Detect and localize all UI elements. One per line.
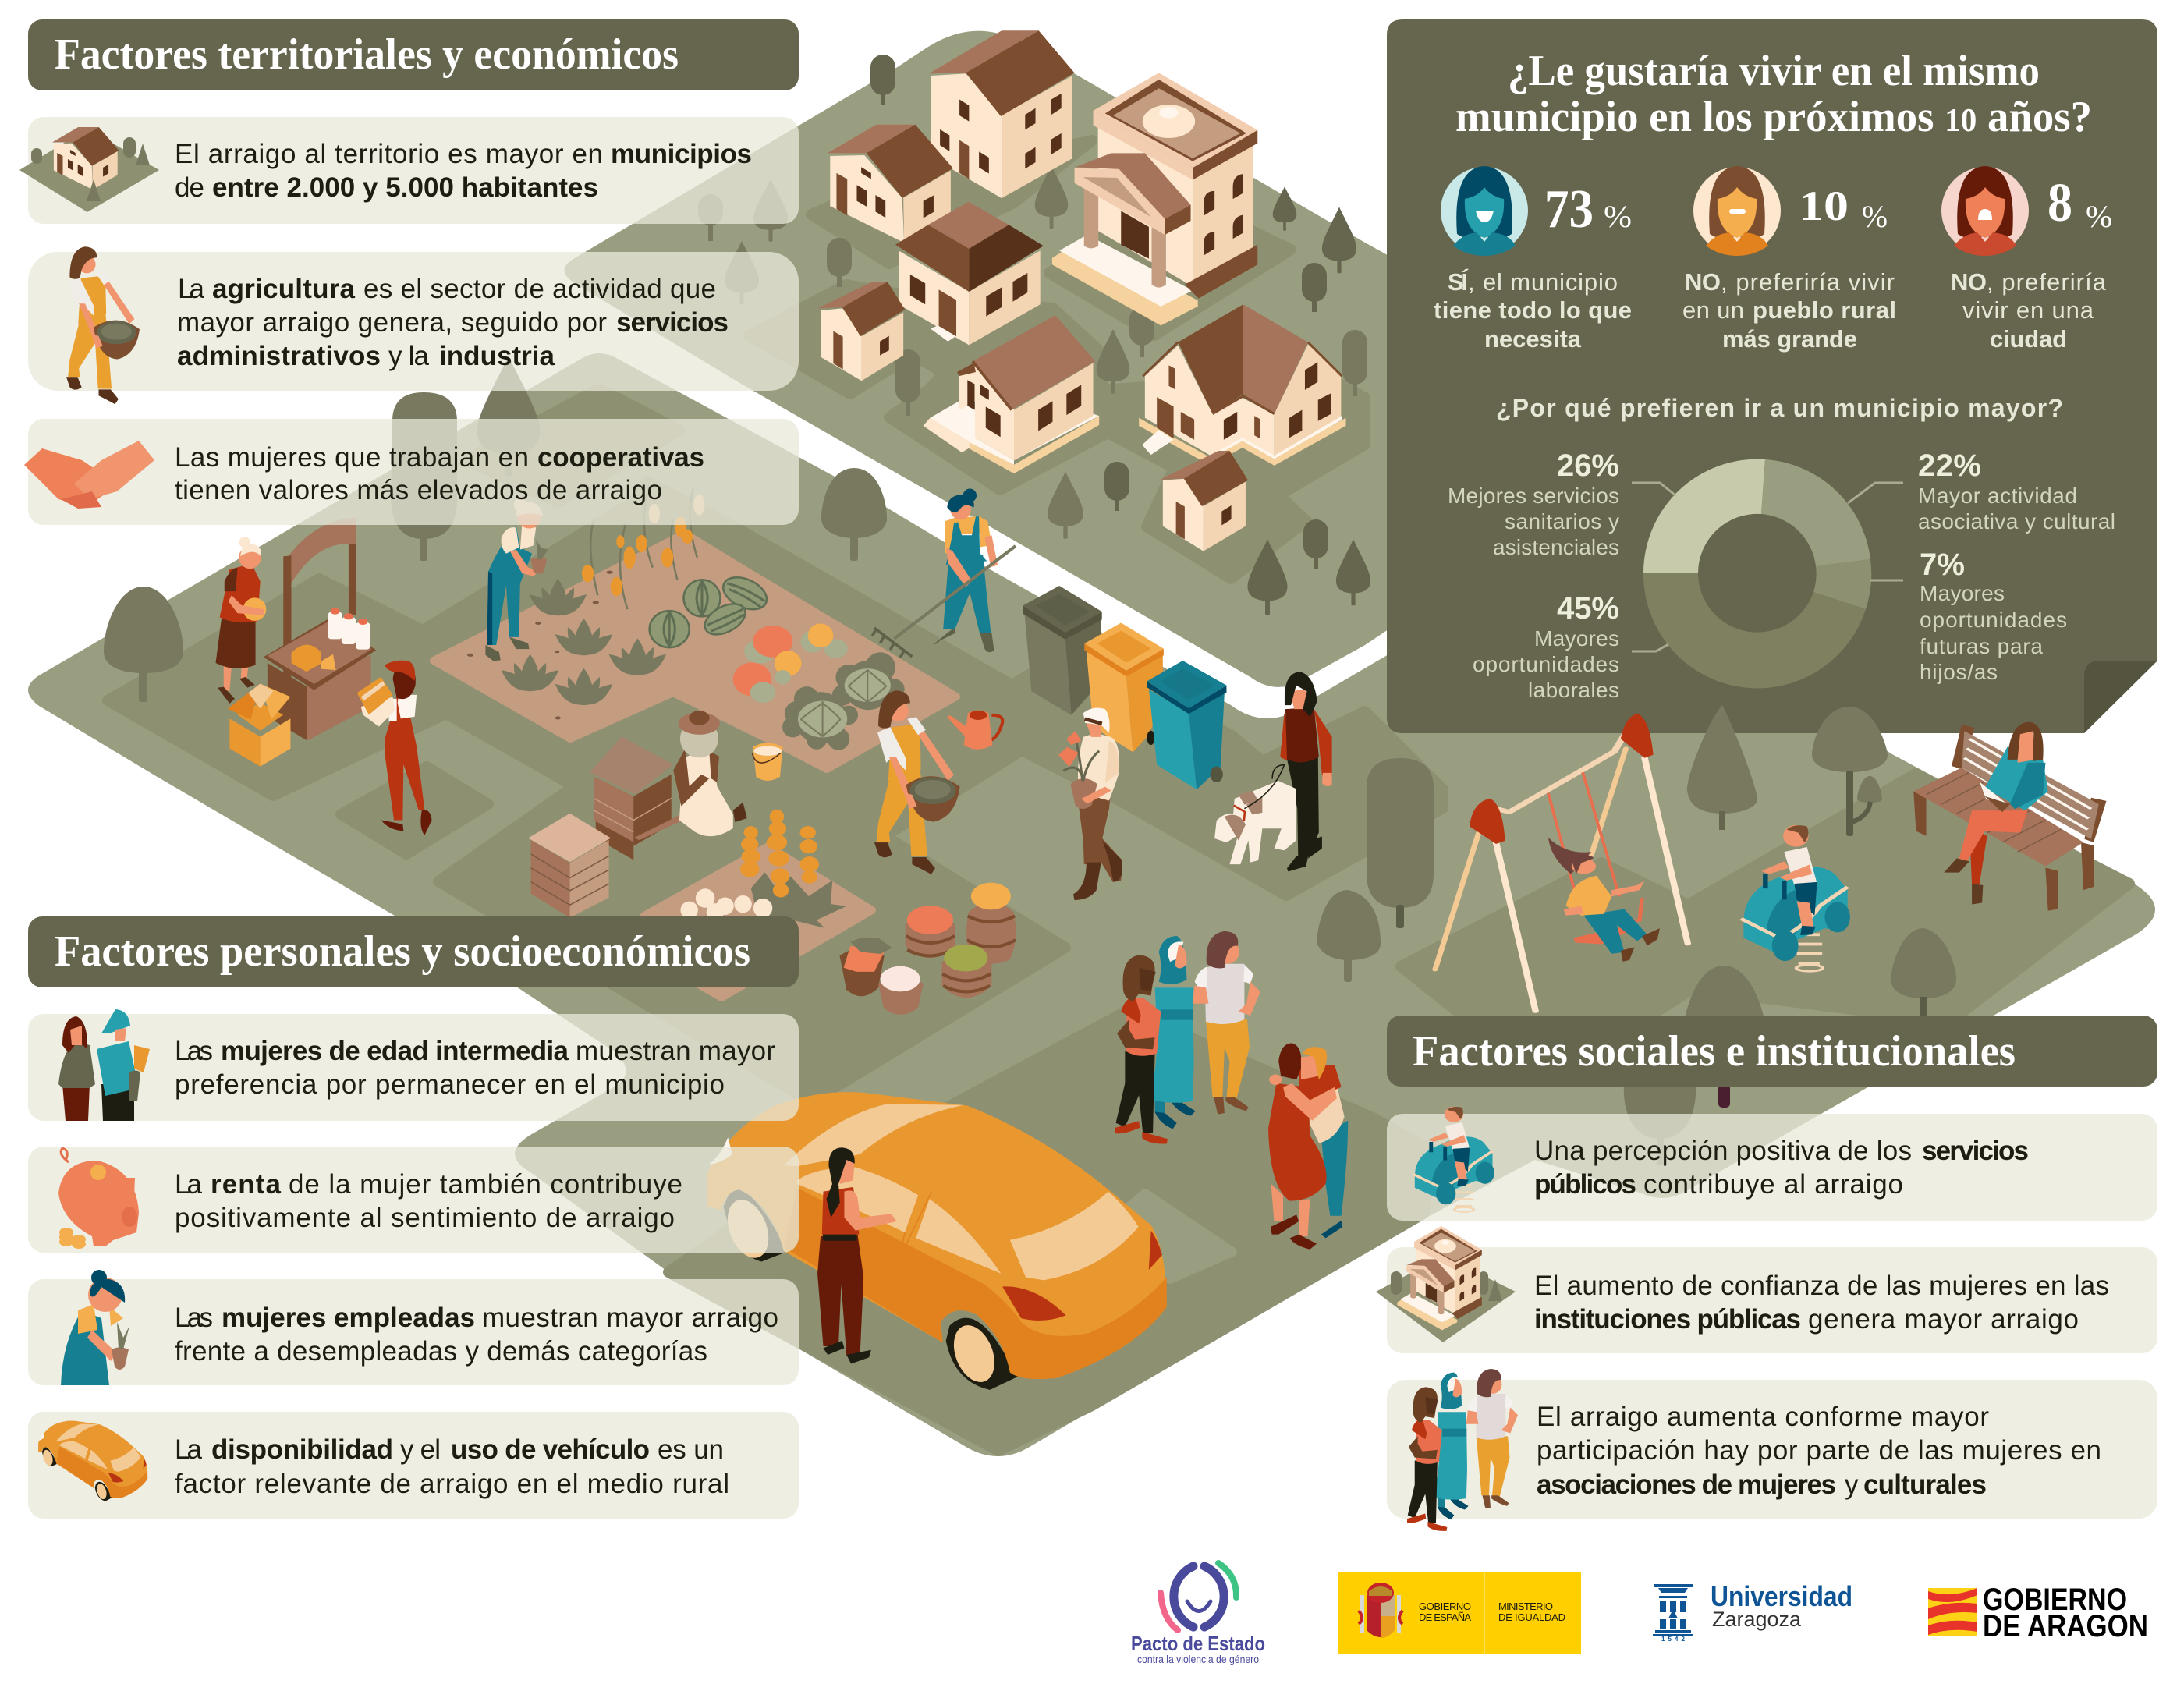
text: agricultura: administrativos [177, 341, 381, 371]
label: 45%: laborales [1528, 678, 1619, 702]
text: instituciones: El aumento de confianza de las mujeres en las [1534, 1271, 2109, 1301]
woman with plant [1058, 707, 1122, 900]
number: 73: % [1604, 199, 1632, 234]
logo: Universidad Zaragoza: Universidad [1711, 1580, 1852, 1612]
watermelons [650, 571, 771, 647]
icon: handshake [24, 441, 154, 509]
market stall [216, 498, 548, 835]
rake woman [872, 489, 1016, 658]
icon: woman with basket [66, 246, 140, 404]
logo: Pacto de Estado: contra la violencia de género [1137, 1653, 1259, 1665]
woman with dog [1214, 672, 1332, 871]
vines and hanging squash [582, 484, 705, 609]
text: agricultura: agricultura [212, 274, 356, 304]
text: servicios publicos: públicos [1534, 1169, 1636, 1200]
text: agricultura: mayor arraigo genera, seguido por [177, 307, 607, 338]
logo: Gobierno de Aragón: GOBIERNO [1983, 1583, 2127, 1617]
face: no 10 [1693, 166, 1781, 256]
text: municipios: El arraigo al territorio es mayor en [175, 139, 603, 169]
trees over the panel edge [1687, 705, 1888, 836]
number: 8: 8 [2048, 173, 2072, 233]
panel title [1455, 47, 2092, 141]
text: vehiculo: es un [658, 1434, 724, 1465]
icon: car [38, 1421, 147, 1501]
woman 1 dark [1115, 955, 1168, 1144]
icon: town hall [1376, 1226, 1516, 1342]
icon: small house [20, 127, 159, 212]
small house low [1160, 451, 1248, 551]
number: 10 [1799, 183, 1888, 234]
text: option city: vivir en una [1962, 296, 2094, 324]
logo: Gobierno de España: MINISTERIO [1498, 1601, 1553, 1612]
text: empleadas: mujeres empleadas [222, 1303, 475, 1333]
beehives and beekeeper [528, 711, 747, 918]
text: agricultura: y la [388, 341, 430, 371]
text: option city: ciudad [1990, 325, 2067, 353]
label: 26%: 26% [1557, 448, 1619, 483]
text: empleadas: frente a desempleadas y demás categorías [175, 1336, 707, 1367]
three women [1115, 931, 1260, 1144]
label: 26%: Mejores servicios [1448, 484, 1619, 508]
label: 7%: hijos/as [1920, 660, 1998, 684]
number: 10: 10 [1799, 183, 1849, 229]
text: vehiculo [175, 1434, 729, 1499]
label: 45%: 45% [1557, 591, 1619, 626]
text: municipios: entre 2.000 y 5.000 habitantes [212, 172, 598, 203]
trees [104, 55, 1956, 1165]
text: vehiculo: disponibilidad [211, 1434, 393, 1465]
text: vehiculo: factor relevante de arraigo en el medio rural [175, 1469, 729, 1499]
text: renta: positivamente al sentimiento de arraigo [175, 1203, 675, 1233]
label: 26%: sanitarios y [1505, 509, 1619, 534]
logo: Gobierno de España: DE ESPAÑA [1419, 1611, 1471, 1623]
icon: three women [1407, 1369, 1518, 1531]
lettuce plants [530, 579, 587, 615]
text: empleadas: muestran mayor arraigo [482, 1303, 778, 1333]
woman at car [817, 1147, 897, 1363]
house with gable [828, 125, 953, 243]
heading: social: Factores sociales e institucionales [1413, 1027, 2016, 1076]
text: cooperativas: Las mujeres que trabajan en [175, 442, 529, 473]
small house [817, 282, 905, 381]
icon: two women [58, 1009, 150, 1121]
label: 45%: Mayores [1534, 626, 1619, 651]
text: edad intermedia: Las [175, 1036, 213, 1066]
text: vehiculo: y el [400, 1434, 441, 1465]
text: vehiculo: uso de vehículo [451, 1434, 650, 1465]
text: cooperativas: tienen valores más elevados de arraigo [175, 475, 662, 505]
label: 45%: oportunidades [1473, 652, 1619, 676]
house tall [929, 30, 1075, 198]
text: municipios: de [175, 172, 204, 203]
barrels and produce [840, 883, 1016, 1015]
logo: Universidad Zaragoza: Zaragoza [1712, 1608, 1802, 1631]
text: municipios [175, 139, 752, 203]
walking figures [874, 672, 1332, 1144]
text: renta [175, 1169, 682, 1233]
text: asociaciones: y [1845, 1469, 1859, 1500]
number: 73: 73 [1544, 179, 1594, 239]
bins [1023, 586, 1226, 789]
label: 45% [1473, 591, 1619, 702]
logo: Pacto de Estado [1131, 1563, 1265, 1665]
heading: territorial: Factores territoriales y económicos [55, 30, 679, 79]
logo: Gobierno de España [1338, 1572, 1581, 1654]
logo: Gobierno de Aragón [1928, 1583, 2148, 1643]
pumpkins [733, 623, 848, 703]
label: 7% [1920, 548, 2067, 684]
text: asociaciones [1537, 1402, 2101, 1500]
big house [1139, 304, 1346, 466]
text: instituciones: instituciones públicas [1534, 1304, 1801, 1335]
text: renta: La [175, 1169, 203, 1200]
subheading: reasons: ¿Por qué prefieren ir a un municipio mayor? [1496, 394, 2063, 422]
text: servicios publicos [1534, 1136, 2029, 1200]
text: renta: de la mujer también contribuye [289, 1169, 682, 1200]
icon: piggy bank [58, 1148, 139, 1249]
text: renta: renta [211, 1169, 282, 1200]
text: servicios publicos: servicios [1922, 1136, 2029, 1166]
text: option city [1951, 268, 2107, 353]
heading: social [1387, 1016, 2157, 1087]
text: agricultura: La [178, 274, 205, 304]
logo: Gobierno de España: GOBIERNO [1419, 1601, 1471, 1612]
label: 22% [1918, 448, 2115, 534]
text: option rural: , preferiría vivir [1721, 268, 1895, 296]
text: option city: , preferiría [1987, 268, 2107, 296]
woman 2 teal [1149, 936, 1196, 1129]
heading: territorial [28, 19, 799, 90]
text: vehiculo: La [175, 1434, 203, 1465]
text: option rural: NO [1685, 268, 1721, 296]
panel title: ¿Le gustaría vivir en el mismo [1508, 47, 2040, 95]
cards: personal [28, 1014, 799, 1519]
panel: survey [1387, 19, 2157, 733]
man: blue overalls [485, 498, 548, 661]
number: 8 [2048, 173, 2112, 234]
cards: social [1387, 1114, 2157, 1519]
text: option yes: necesita [1484, 325, 1582, 353]
label: 22%: asociativa y cultural [1918, 509, 2115, 534]
logo: Universidad Zaragoza [1653, 1580, 1852, 1643]
rocking car with boy [1741, 825, 1850, 971]
number: 73 [1544, 179, 1632, 239]
text: option yes: , el municipio [1468, 268, 1618, 296]
text: agricultura: servicios [616, 307, 729, 338]
town hall [1052, 73, 1257, 325]
cabbages [782, 652, 905, 750]
icon: woman employed [61, 1270, 129, 1385]
cards: territorial [28, 117, 799, 525]
text: agricultura [177, 274, 729, 371]
label: 7%: 7% [1920, 548, 1965, 582]
heading: personal [28, 916, 799, 987]
text: cooperativas [175, 442, 704, 505]
text: option yes: tiene todo lo que [1434, 296, 1632, 324]
house with porch [924, 315, 1099, 473]
logo: Gobierno de España: DE IGUALDAD [1498, 1611, 1565, 1623]
face: no 8 [1941, 166, 2029, 256]
text: cooperativas: cooperativas [537, 442, 704, 473]
watering can [947, 710, 1002, 750]
park: swing, toy and bench [1435, 714, 2106, 1011]
text: instituciones: genera mayor arraigo [1808, 1304, 2079, 1335]
text: empleadas: Las [175, 1303, 213, 1333]
text: edad intermedia: preferencia por permanecer en el municipio [175, 1069, 725, 1100]
text: option rural: más grande [1722, 325, 1857, 353]
flower stalks [740, 810, 846, 928]
woman 3 white top [1193, 931, 1260, 1115]
text: option yes [1434, 268, 1632, 353]
text: asociaciones: asociaciones de mujeres [1537, 1469, 1836, 1500]
donut chart [1632, 459, 1903, 688]
woman: red overalls [357, 661, 432, 835]
text: servicios publicos: Una percepción positiva de los [1534, 1136, 1912, 1166]
text: option rural: en un [1682, 296, 1744, 324]
text: asociaciones: participación hay por parte de las mujeres en [1537, 1435, 2101, 1466]
number: 10: % [1862, 199, 1888, 234]
text: municipios: municipios [611, 139, 752, 169]
bucket [752, 743, 783, 781]
label: 7%: oportunidades [1920, 608, 2067, 632]
garden and crops [467, 484, 771, 719]
swing set [1435, 714, 1688, 1011]
text: empleadas [175, 1303, 778, 1367]
bench and woman [1913, 722, 2106, 911]
text: option rural: pueblo rural [1753, 296, 1896, 324]
label: 26%: asistenciales [1493, 535, 1619, 559]
label: 22%: 22% [1918, 448, 1981, 483]
text: servicios publicos: contribuye al arraigo [1643, 1169, 1903, 1200]
hugging couple [1268, 1043, 1348, 1250]
logo: Gobierno de Aragón: DE ARAGON [1983, 1609, 2148, 1643]
label: 7%: futuras para [1920, 634, 2043, 658]
logo: Universidad Zaragoza: 1542 [1661, 1636, 1686, 1643]
house hip roof [895, 202, 1044, 345]
text: edad intermedia: muestran mayor [576, 1036, 775, 1066]
text: instituciones [1534, 1271, 2109, 1335]
icon: rocking toy [1413, 1107, 1494, 1212]
people: central [872, 489, 1016, 658]
text: option rural [1682, 268, 1896, 353]
text: option yes: SÍ [1448, 268, 1469, 296]
label: 22%: Mayor actividad [1918, 484, 2077, 508]
woman: market seller [216, 537, 266, 704]
number: 8: % [2086, 199, 2112, 234]
text: asociaciones: El arraigo aumenta conforme mayor [1537, 1402, 1989, 1432]
panel title: municipio en los próximos 10 años? [1455, 93, 2092, 141]
text: agricultura: industria [439, 341, 555, 371]
text: agricultura: es el sector de actividad que [363, 274, 716, 304]
logo: Pacto de Estado: Pacto de Estado [1131, 1632, 1265, 1655]
text: asociaciones: culturales [1863, 1469, 1987, 1500]
car [707, 1092, 1167, 1390]
text: edad intermedia [175, 1036, 775, 1100]
text: edad intermedia: mujeres de edad intermedia [221, 1036, 569, 1066]
boxes [228, 684, 290, 767]
town: houses [817, 30, 1346, 551]
label: 7%: Mayores [1920, 581, 2005, 605]
woman with basket [874, 690, 960, 874]
label: 26% [1448, 448, 1619, 559]
text: option city: NO [1951, 268, 1987, 296]
face: yes 73 [1441, 166, 1528, 256]
heading: personal: Factores personales y socioeconómicos [55, 927, 750, 976]
